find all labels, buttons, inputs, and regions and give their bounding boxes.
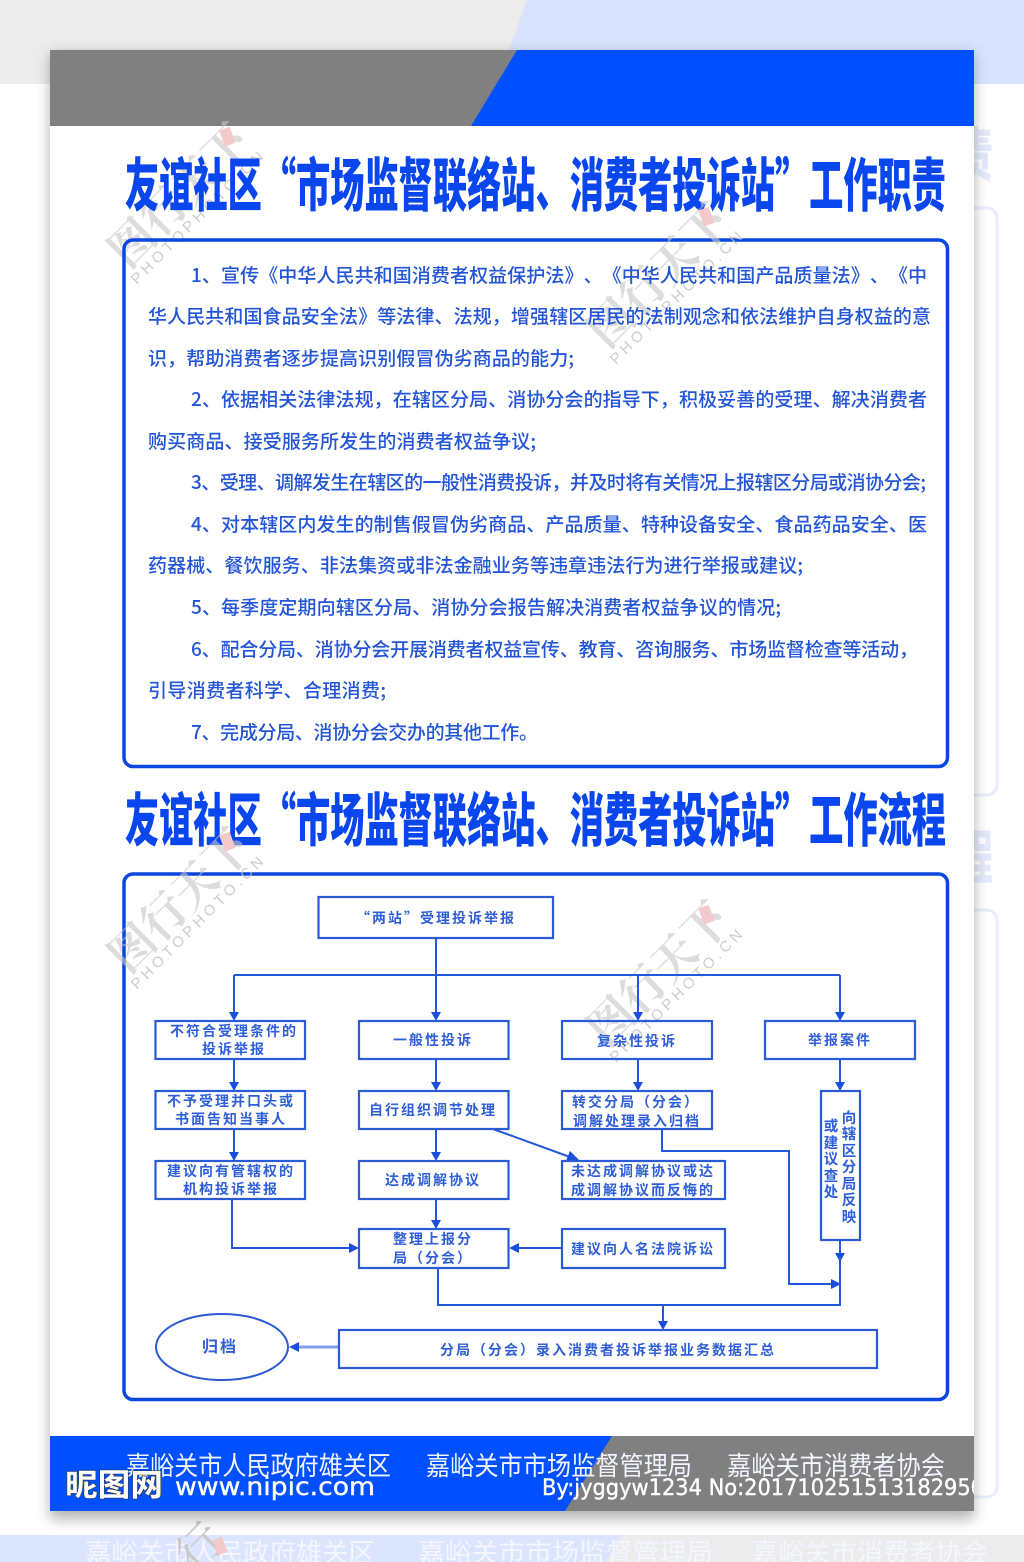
duties text: 5、每季度定期向辖区分局、消协分会报告解决消费者权益争议的情况;	[191, 593, 781, 620]
box: report case: 举报案件	[808, 1030, 872, 1050]
ghost background panel: 责	[958, 109, 993, 193]
box: vertical report	[821, 1091, 860, 1240]
box: suggest competent agency	[156, 1161, 305, 1199]
box: not eligible	[156, 1021, 305, 1059]
box: suggest lawsuit: 建议向人名法院诉讼	[571, 1239, 715, 1259]
box: report case	[765, 1021, 915, 1059]
box: vertical report: 议	[824, 1148, 839, 1169]
box: agreement reached: 达成调解协议	[385, 1170, 481, 1190]
footer band	[50, 1436, 974, 1511]
nipic watermark: www.nipic.com	[175, 1472, 375, 1501]
ellipse: archive: 归档	[202, 1333, 238, 1357]
nipic watermark: 昵图网	[65, 1460, 163, 1505]
duties text: 2、依据相关法律法规，在辖区分局、消协分会的指导下，积极妥善的受理、解决消费者	[191, 385, 927, 412]
box: not eligible: 不符合受理条件的	[170, 1021, 298, 1041]
ghost background panel	[950, 109, 997, 1497]
box: receive complaints	[318, 897, 553, 938]
panel: duties	[124, 187, 948, 766]
header band	[50, 50, 974, 126]
duties text: 4、对本辖区内发生的制售假冒伪劣商品、产品质量、特种设备安全、食品药品安全、医	[191, 510, 927, 537]
box: transfer to branch: 转交分局（分会）	[572, 1092, 700, 1112]
duties text: 华人民共和国食品安全法》等法律、法规，增强辖区居民的法制观念和依法维护自身权益的意	[148, 302, 931, 329]
duties text: 引导消费者科学、合理消费;	[148, 676, 386, 703]
nipic watermark	[65, 1460, 375, 1505]
box: branch summary: 分局（分会）录入消费者投诉举报业务数据汇总	[440, 1340, 776, 1360]
box: self mediation: 自行组织调节处理	[369, 1100, 497, 1120]
box: branch summary	[339, 1330, 877, 1368]
footer band: 嘉峪关市消费者协会	[727, 1446, 945, 1483]
duties text	[148, 261, 931, 745]
box: receive complaints: “两站”受理投诉举报	[356, 908, 516, 928]
watermark: top left: PHOTOPHOTO.CN	[128, 149, 267, 288]
box: complex complaint: 复杂性投诉	[597, 1031, 677, 1051]
panel: workflow	[91, 812, 947, 1400]
box: vertical report: 分	[842, 1156, 857, 1177]
watermark: workflow right: PHOTOPHOTO.CN	[607, 927, 746, 1066]
duties text: 7、完成分局、消协分会交办的其他工作。	[191, 718, 538, 745]
duties text: 药器械、餐饮服务、非法集资或非法金融业务等违章违法行为进行举报或建议;	[148, 551, 803, 578]
box: suggest competent agency: 机构投诉举报	[183, 1179, 279, 1199]
watermark: workflow left: 图行天下	[91, 812, 264, 985]
box: self mediation	[359, 1091, 508, 1129]
box: suggest lawsuit	[562, 1229, 725, 1268]
watermark: top left: 图行天下	[91, 107, 264, 280]
box: vertical report: 或	[824, 1115, 839, 1136]
box: submit report	[359, 1229, 508, 1268]
watermark: workflow left: PHOTOPHOTO.CN	[128, 854, 267, 993]
box: not accepted: 书面告知当事人	[175, 1109, 287, 1129]
box: not accepted: 不予受理并口头或	[167, 1091, 295, 1111]
box: general complaint	[359, 1021, 508, 1059]
box: vertical report: 建	[824, 1132, 839, 1153]
watermark: workflow right: 图行天下	[570, 885, 743, 1058]
ellipse: archive	[156, 1314, 288, 1380]
box: no agreement: 未达成调解协议或达	[571, 1161, 715, 1181]
box: vertical report: 查	[824, 1165, 839, 1186]
arrowheads	[229, 1012, 845, 1352]
box: submit report: 局（分会）	[393, 1248, 473, 1268]
watermark: duties panel: PHOTOPHOTO.CN	[607, 229, 746, 368]
box: vertical report: 向	[842, 1107, 856, 1128]
box: vertical report: 区	[842, 1140, 856, 1161]
duties text: 1、宣传《中华人民共和国消费者权益保护法》、《中华人民共和国产品质量法》、《中	[191, 261, 927, 288]
box: vertical report: 辖	[842, 1123, 856, 1144]
footer organisations: 嘉峪关市人民政府雄关区	[126, 1446, 391, 1483]
box: not eligible: 投诉举报	[202, 1039, 266, 1059]
box: no agreement: 成调解协议而反悔的	[571, 1180, 715, 1200]
box: no agreement	[562, 1161, 725, 1200]
watermark: duties panel: 图行天下	[570, 187, 743, 360]
box: complex complaint	[562, 1021, 712, 1059]
duties text: 识，帮助消费者逐步提高识别假冒伪劣商品的能力;	[148, 344, 574, 371]
box: suggest competent agency: 建议向有管辖权的	[167, 1161, 295, 1181]
duties text: 3、受理、调解发生在辖区的一般性消费投诉，并及时将有关情况上报辖区分局或消协分会;	[191, 468, 926, 495]
box: transfer to branch	[562, 1091, 712, 1131]
box: transfer to branch: 调解处理录入归档	[573, 1111, 701, 1131]
connector lines	[232, 938, 840, 1347]
box: not accepted	[156, 1091, 305, 1129]
box: vertical report: 处	[824, 1181, 839, 1202]
duties text: 购买商品、接受服务所发生的消费者权益争议;	[148, 427, 536, 454]
box: vertical report: 局	[842, 1173, 856, 1194]
box: submit report: 整理上报分	[393, 1229, 473, 1249]
box: vertical report: 反	[842, 1189, 856, 1210]
box: general complaint: 一般性投诉	[393, 1030, 473, 1050]
duties text: 6、配合分局、消协分会开展消费者权益宣传、教育、咨询服务、市场监督检查等活动，	[191, 635, 918, 662]
box: vertical report: 映	[842, 1206, 857, 1227]
ghost background panel: 程	[958, 811, 993, 895]
box: agreement reached	[359, 1161, 508, 1199]
footer band: 嘉峪关市市场监督管理局	[426, 1446, 692, 1483]
